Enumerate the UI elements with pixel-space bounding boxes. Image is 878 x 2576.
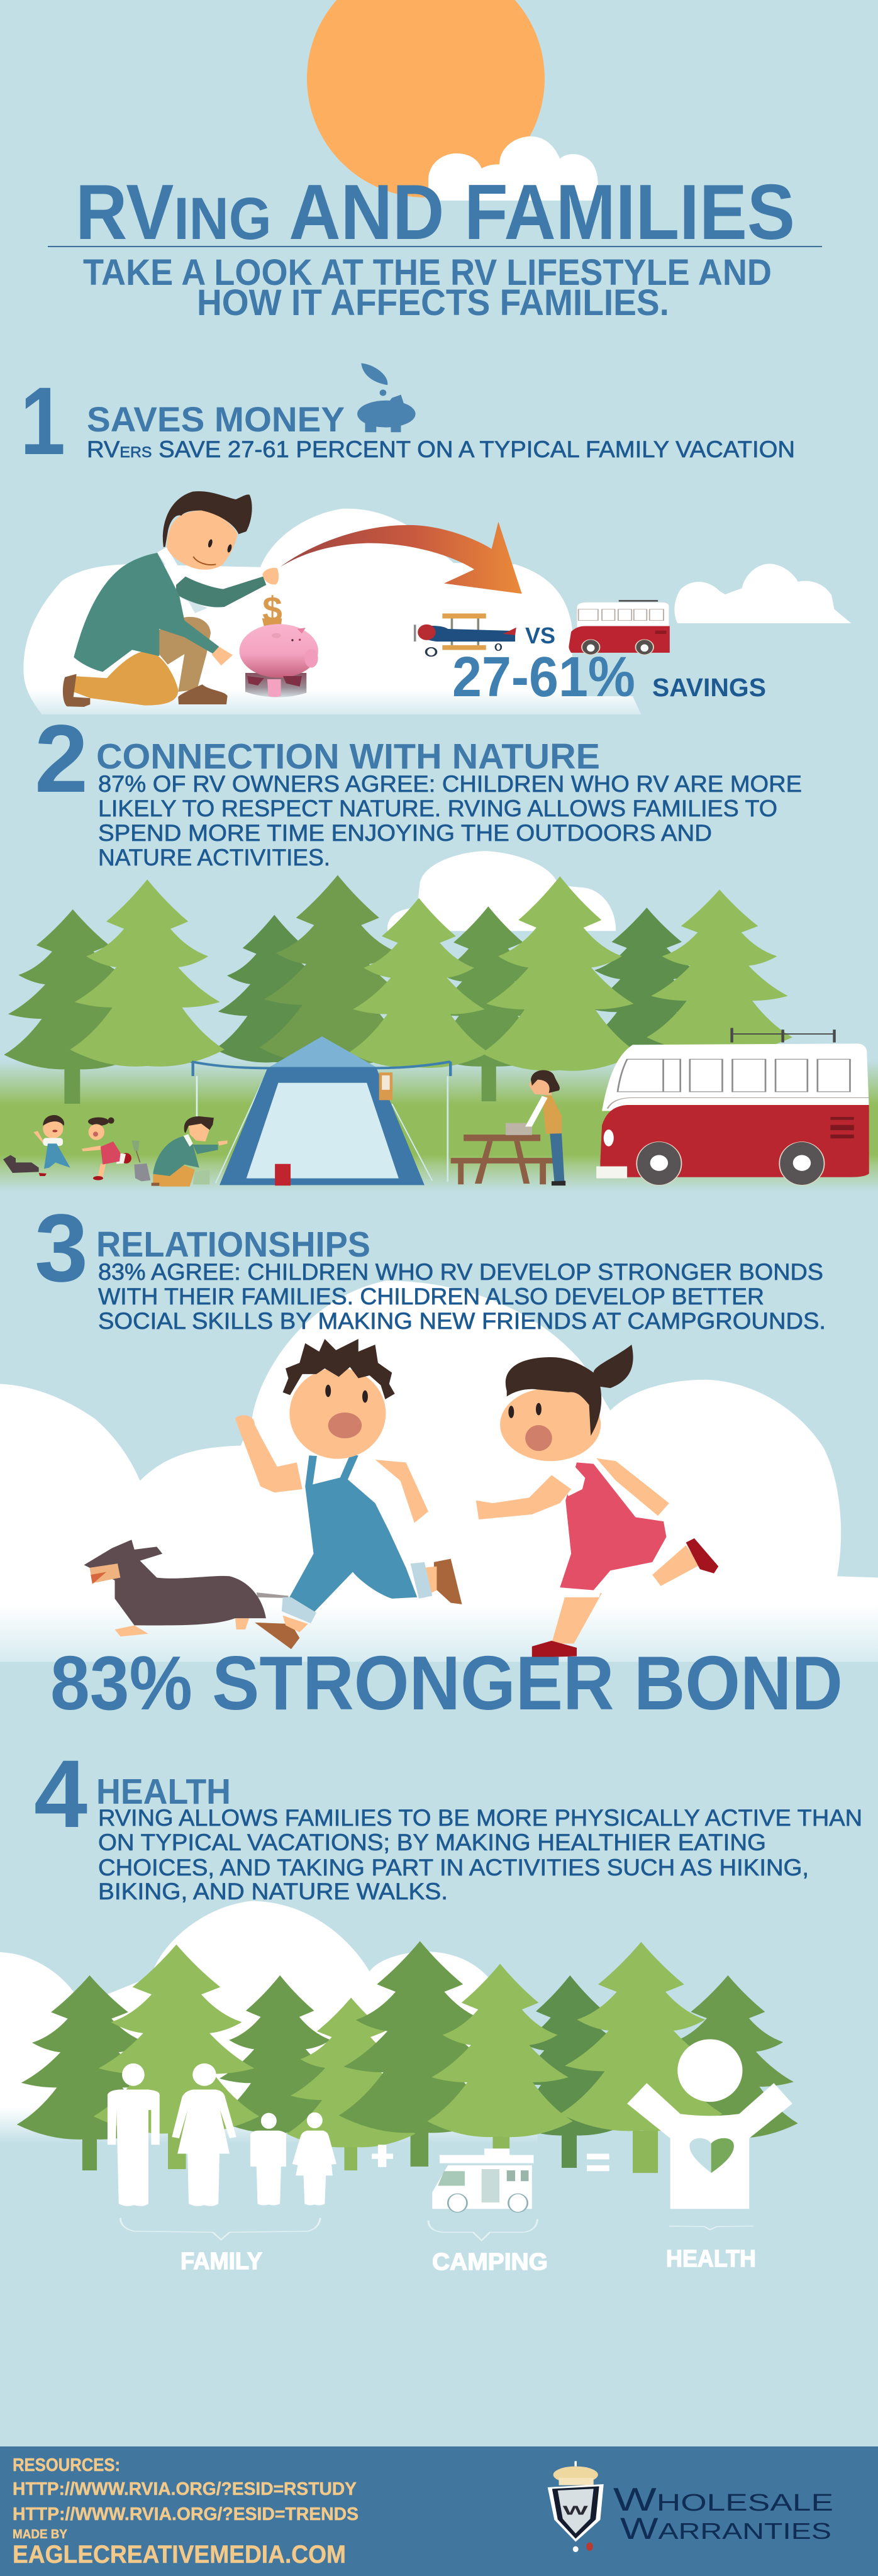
body text [98, 1259, 826, 1334]
statistic: savings: 27-61% [452, 646, 635, 709]
arrow: savings arrow [280, 521, 522, 594]
panel: section 2 connection with nature [0, 705, 878, 1192]
icon: running girl [476, 1345, 718, 1658]
illustration: forest [17, 1941, 798, 2173]
resources text: MADE BY [13, 2528, 68, 2541]
footer band [0, 2446, 878, 2576]
label: family: FAMILY [181, 2248, 262, 2275]
icon: dog [84, 1540, 289, 1636]
heading: connection with nature: CONNECTION WITH NATURE [96, 736, 600, 777]
icon: healthy person with heart [627, 2039, 792, 2209]
icon: picnic table [451, 1135, 553, 1184]
logo: shield: W [563, 2502, 588, 2518]
icon: plus sign [372, 2145, 393, 2167]
label: health: HEALTH [666, 2246, 756, 2272]
icon: pink piggy bank with coin [240, 590, 318, 697]
statistic: savings [452, 646, 766, 709]
panel: section 1 saves money [20, 364, 851, 714]
resources text [13, 2455, 358, 2568]
body text: 87% OF RV OWNERS AGREE: CHILDREN WHO RV ARE MORE [98, 771, 802, 797]
heading: saves money: SAVES MONEY [87, 399, 345, 439]
body text [98, 771, 802, 870]
statistic: savings: SAVINGS [652, 673, 766, 702]
panel: footer [0, 2446, 878, 2576]
section number 2: 2 [35, 705, 88, 813]
icon: large camper van [596, 1028, 869, 1185]
body text: SOCIAL SKILLS BY MAKING NEW FRIENDS AT CAMPGROUNDS. [98, 1308, 826, 1334]
body text: LIKELY TO RESPECT NATURE. RVING ALLOWS FAMILIES TO [98, 796, 777, 821]
panel: section 4 health [0, 1740, 862, 2275]
body text [98, 1805, 862, 1904]
icon: piggy bank with wing [357, 364, 416, 432]
body text: SPEND MORE TIME ENJOYING THE OUTDOORS AND [98, 820, 712, 846]
icon: header cloud [428, 136, 608, 201]
body text: BIKING, AND NATURE WALKS. [98, 1879, 448, 1904]
icon: tent [191, 1036, 452, 1185]
illustration: white clouds [0, 1901, 538, 2143]
icon: pink piggy bank with coin: $ [262, 590, 282, 630]
resources text: HTTP://WWW.RVIA.ORG/?ESID=TRENDS [13, 2504, 358, 2524]
logo: wholesale warranties wordmark: W ARRANTIES [620, 2512, 831, 2546]
icon: sun [307, 0, 545, 197]
illustration: forest [4, 875, 792, 1104]
logo: shield [548, 2461, 604, 2552]
resources text: RESOURCES: [13, 2455, 120, 2475]
ground band [0, 1060, 878, 1192]
header panel [48, 0, 822, 323]
body text: WITH THEIR FAMILIES. CHILDREN ALSO DEVELOP BETTER [98, 1284, 764, 1309]
heading: health: HEALTH [96, 1772, 231, 1812]
resources text: EAGLECREATIVEMEDIA.COM [13, 2541, 346, 2568]
panel: section 3 relationships [0, 1194, 878, 1726]
section number 1: 1 [20, 367, 65, 475]
icon: biplane [414, 613, 516, 656]
icon: rv [432, 2148, 533, 2212]
body text: 83% AGREE: CHILDREN WHO RV DEVELOP STRONGER BONDS [98, 1259, 823, 1285]
logo: wholesale warranties wordmark [613, 2482, 833, 2546]
icon: woman cooking [506, 1070, 565, 1185]
subtitle: TAKE A LOOK AT THE RV LIFESTYLE AND [83, 252, 772, 293]
icon: family figures [108, 2063, 336, 2206]
resources text: HTTP://WWW.RVIA.ORG/?ESID=RSTUDY [13, 2479, 357, 2499]
body text: RVERS SAVE 27-61 PERCENT ON A TYPICAL FAMILY VACATION [87, 436, 795, 462]
icon: cloud behind trees [387, 851, 616, 931]
body text: RVING ALLOWS FAMILIES TO BE MORE PHYSICALLY ACTIVE THAN [98, 1805, 862, 1831]
body text: CHOICES, AND TAKING PART IN ACTIVITIES SUCH AS HIKING, [98, 1855, 809, 1880]
icon: man with piggy bank [63, 491, 279, 707]
body text: ON TYPICAL VACATIONS; BY MAKING HEALTHIER EATING [98, 1829, 766, 1855]
section number 3: 3 [35, 1194, 88, 1302]
divider rule [48, 246, 822, 247]
illustration: white clouds [0, 1280, 878, 1662]
subtitle [83, 252, 772, 323]
section number 4: 4 [34, 1740, 87, 1848]
title: RVING AND FAMILIES [75, 169, 795, 256]
icon: red bus [569, 600, 670, 655]
icon: right cloud [674, 564, 851, 623]
logo: wholesale warranties wordmark: W HOLESALE [613, 2482, 833, 2518]
subtitle: HOW IT AFFECTS FAMILIES. [197, 282, 669, 323]
heading: relationships: RELATIONSHIPS [96, 1224, 370, 1265]
icon: small family setting up camp [3, 1115, 228, 1187]
icon: equals sign [587, 2154, 609, 2171]
illustration: cloud behind man [23, 509, 641, 714]
brackets under icons [120, 2218, 753, 2240]
label: camping: CAMPING [432, 2249, 548, 2275]
icon: running boy [235, 1339, 462, 1649]
body text: NATURE ACTIVITIES. [98, 845, 330, 870]
label: vs: VS [525, 623, 555, 648]
